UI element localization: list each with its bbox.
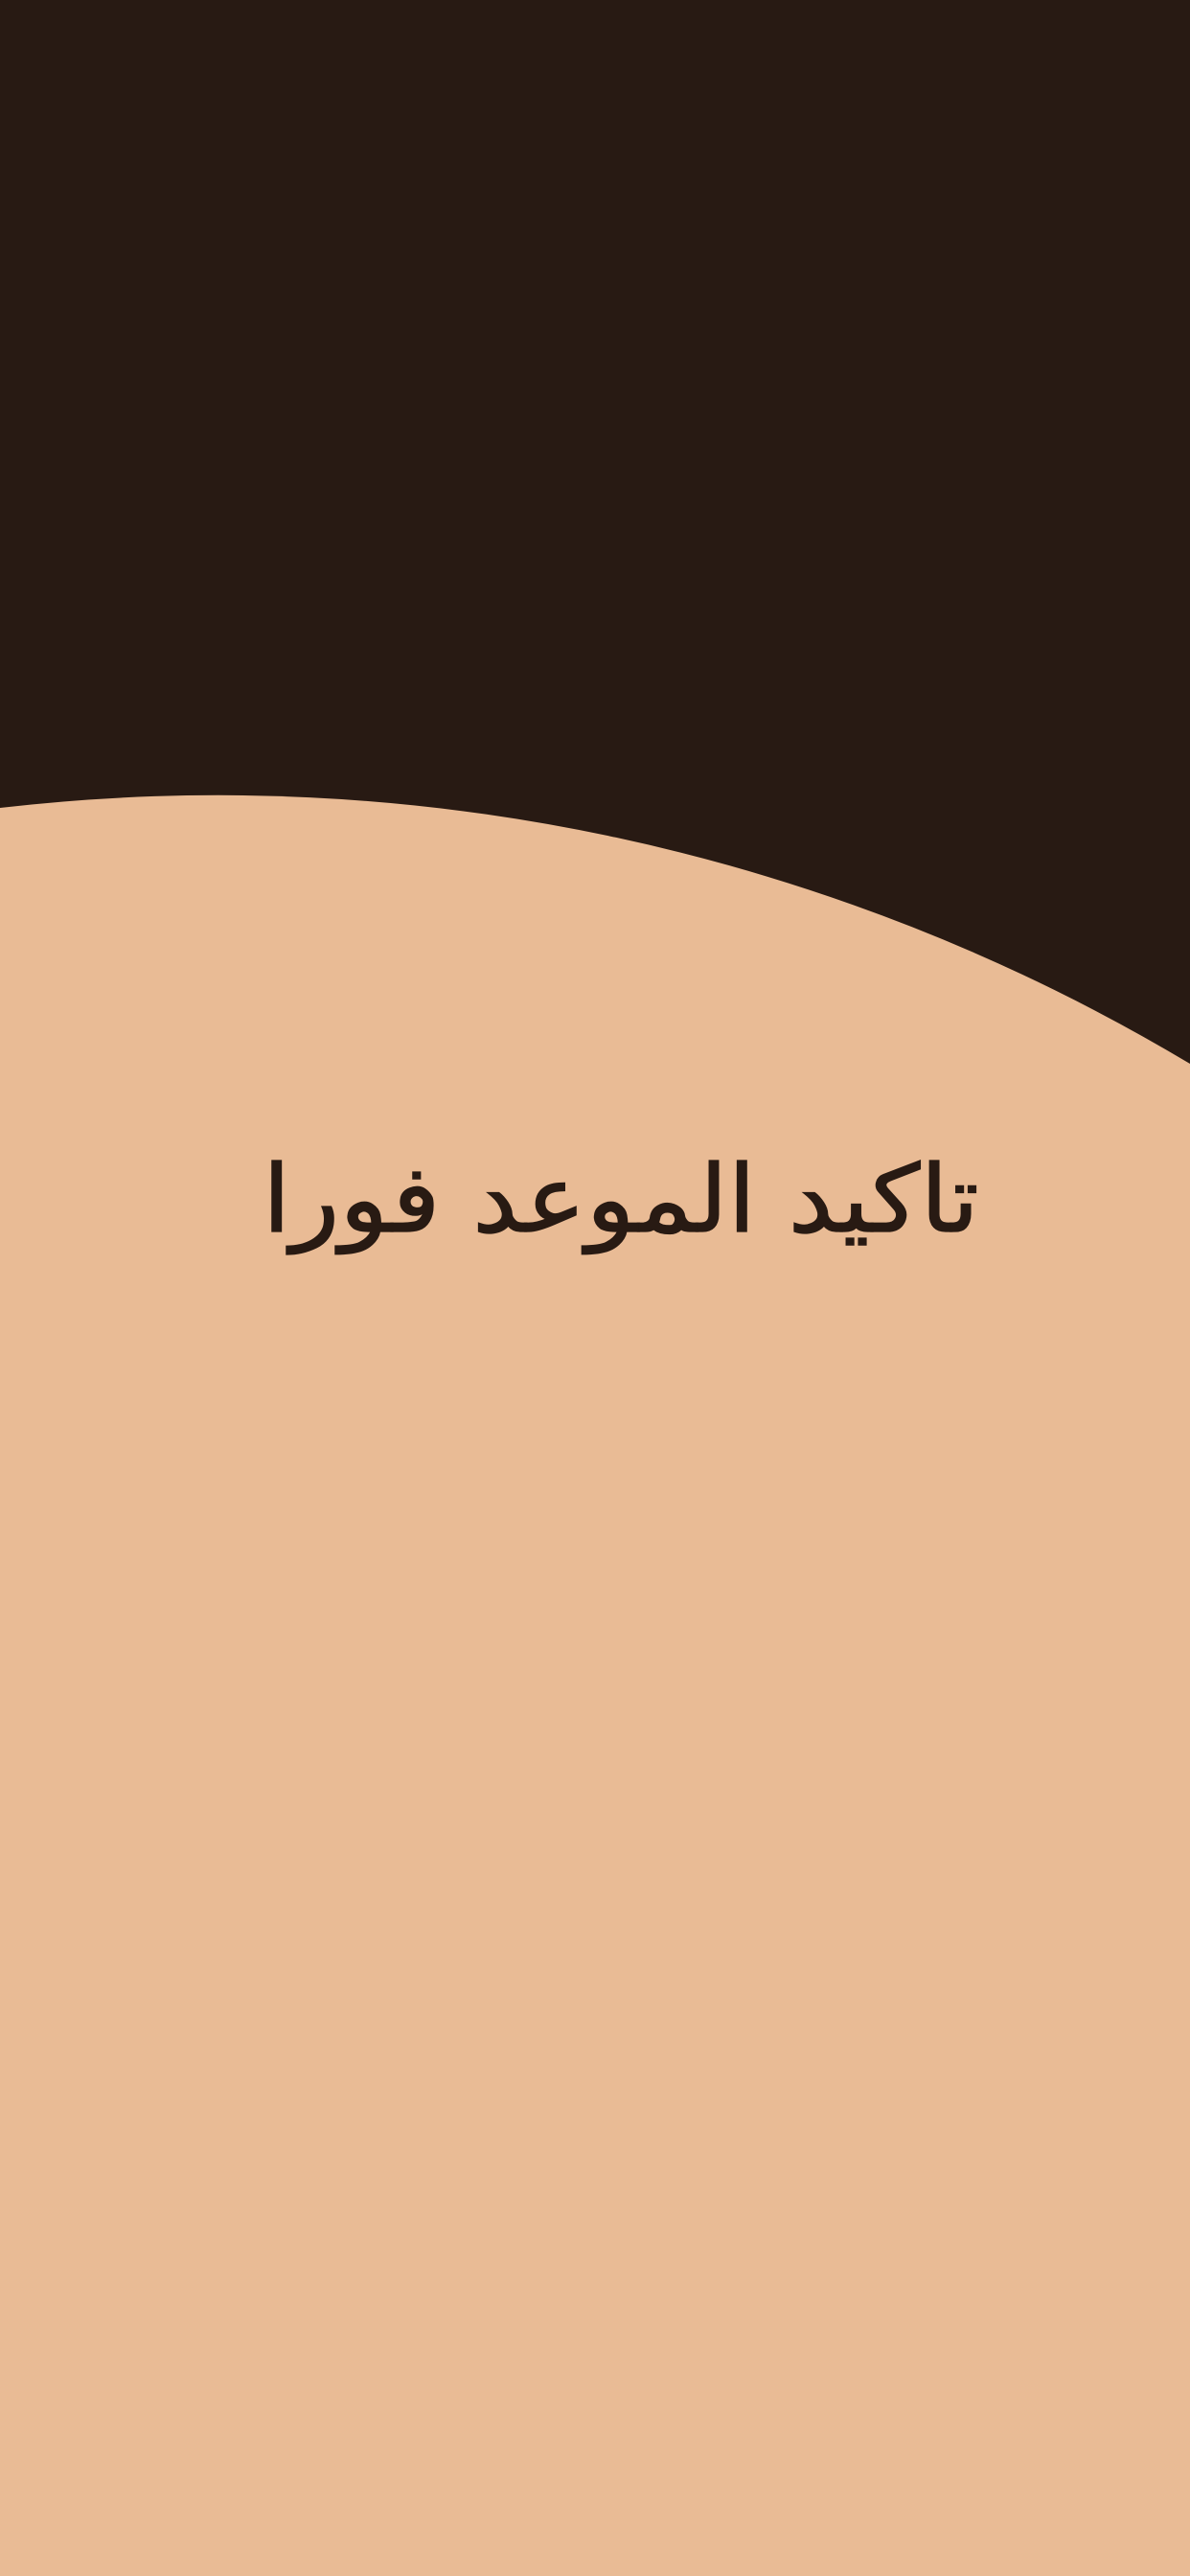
peach curved panel: [0, 795, 1190, 2576]
heading: تاكيد الموعد فورا: [263, 1145, 979, 1254]
dark top background: [0, 0, 1190, 1150]
